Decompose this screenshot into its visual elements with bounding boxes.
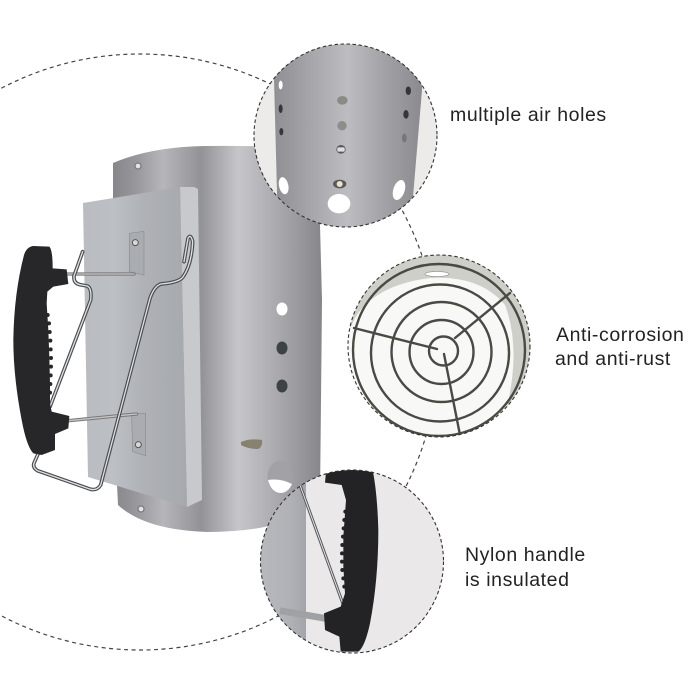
wire grate rings and spokes — [353, 264, 525, 436]
label: nylon handle is insulated: Nylon handle — [465, 544, 586, 566]
label: multiple air holes: multiple air holes — [450, 104, 607, 126]
mounting brackets — [129, 231, 146, 456]
heat shield plate — [83, 187, 202, 507]
zoom circle: nylon handle — [250, 469, 444, 657]
upper rim of bowl — [350, 255, 530, 406]
plate strip close-up — [260, 482, 306, 640]
zoom circle: charcoal grate — [345, 250, 532, 437]
rivets on cylinder — [135, 163, 144, 512]
upper mounting slot — [425, 271, 449, 277]
rod and wire close-up — [280, 485, 343, 618]
charcoal chimney product — [13, 146, 322, 532]
air holes close-up — [277, 81, 411, 213]
wire frame — [34, 236, 193, 490]
label: anti-corrosion and anti-rust: and anti-rust — [555, 348, 671, 370]
metal rods — [67, 274, 137, 421]
handle assembly — [13, 231, 193, 490]
zoom circle: air holes — [254, 40, 437, 240]
cylinder body — [113, 146, 322, 532]
label: nylon handle is insulated — [465, 544, 586, 591]
label: anti-corrosion and anti-rust: Anti-corrosion — [556, 324, 684, 346]
large dashed circle — [0, 54, 438, 650]
black handle close-up — [324, 469, 378, 652]
label: anti-corrosion and anti-rust — [555, 324, 684, 370]
label: nylon handle is insulated: is insulated — [465, 569, 570, 591]
black nylon handle — [13, 246, 69, 455]
air holes on cylinder — [241, 302, 292, 494]
perforated cylinder close-up — [273, 40, 422, 240]
